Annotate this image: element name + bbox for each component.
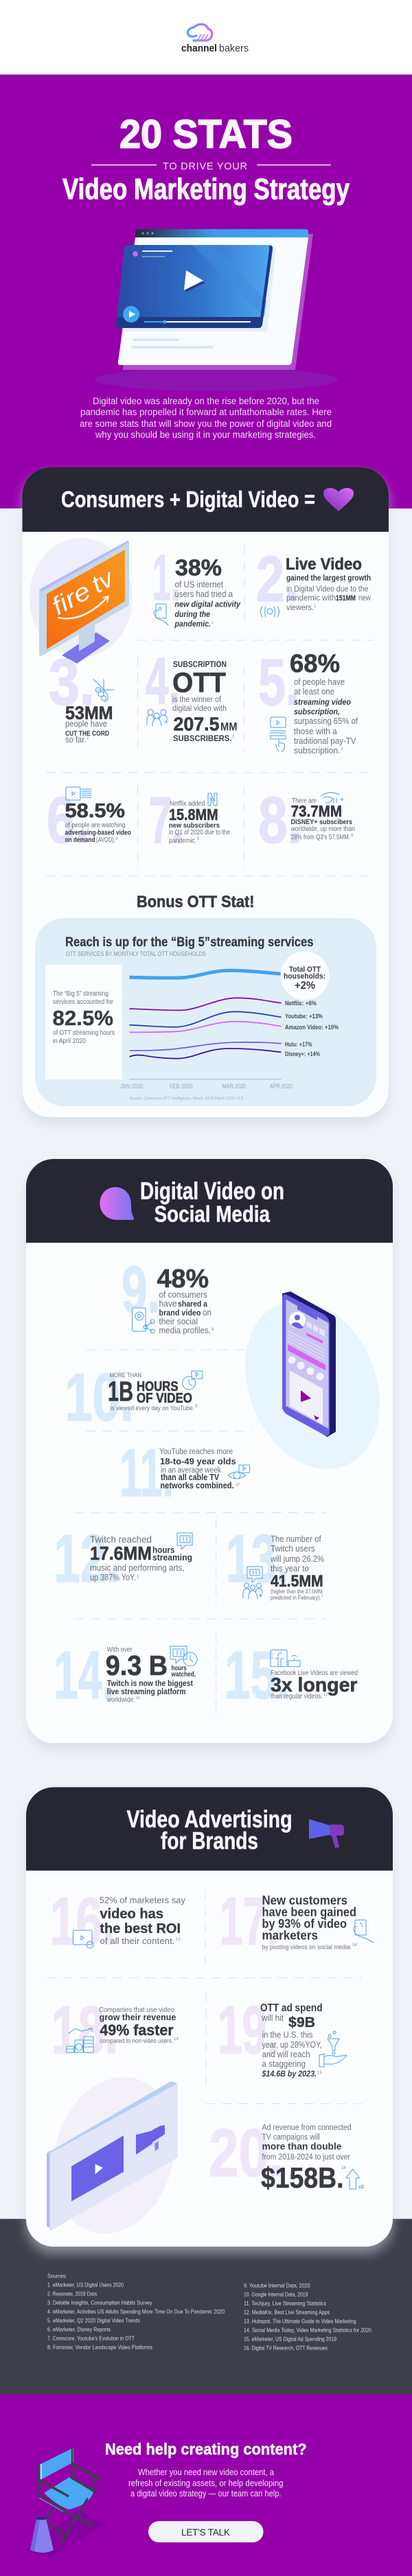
heading: digital video on social media [140,1178,284,1227]
stat 1 [152,541,241,629]
stat 3: 2 [87,736,89,740]
stat 1: new digital activity [174,600,241,609]
heading: digital video on social media: Social Media [154,1202,271,1227]
stat 19: a staggering [262,2059,306,2069]
stat 12: Twitch reached [90,1534,152,1545]
sources: right column: 10. Google Internal Data, 2019 [244,2291,308,2298]
chart labels: Hulu: +17% [285,1041,312,1049]
stat 4: 4. [146,644,180,718]
stat 12: hours [152,1545,174,1555]
stat 2: 1 [314,605,317,609]
stat 6: 6. [47,784,89,857]
stat 6: 4 [115,837,118,841]
intro paragraph [80,396,332,440]
stat 20: more than double [262,2141,342,2152]
stat 3: CUT THE CORD [65,729,109,738]
stat 16: of all their content. [100,1936,174,1946]
illustration: fire tv monitor: fire [47,576,95,620]
logo: channel bakers [181,24,249,54]
stat 2 [256,543,371,617]
stat 1: during the [174,609,210,619]
logo: channel bakers: bakers [219,43,249,54]
stat 19: in the U.S. this [262,2030,312,2039]
stat 17: 17. [220,1884,279,1959]
line chart: APR-2020 [270,1083,293,1090]
line chart: JAN-2020 [120,1083,143,1090]
stat 7: 15.8MM [169,806,218,823]
stat 12: music and performing arts, [90,1563,185,1573]
callout: total ott households: households: [284,972,325,981]
stat 13: 41.5MM [271,1572,323,1591]
stat 12: up 387% YoY. [90,1573,136,1582]
dividers [74,1350,325,1718]
stat 17 [220,1884,374,1959]
stat 9: shared a [178,1299,207,1309]
stat 5: 68% [290,649,340,678]
panel: video advertising for brands [26,1787,393,2253]
title [62,113,350,206]
sources: left column: 4. eMarketer, Activities US Adults Spending More Time On Due To Pandemic 2020 [47,2308,225,2315]
stat 6: (AVOD). [96,836,115,844]
stat 19: 19. [218,1992,279,2068]
stat 2: Live Video [286,555,362,574]
stat 6: 58.5% [65,800,125,822]
stat 12: streaming [152,1552,192,1562]
stat 7: new subscribers [169,821,220,830]
stat 9 [122,1253,214,1335]
stat 15: 15. [225,1637,289,1713]
sources: right column: 14. Social Media Today, Video Marketing Statistics for 2020 [244,2327,371,2334]
call to action text [128,2467,283,2498]
call to action text: Whether you need new video content, a [138,2467,275,2477]
stat 17: marketers [262,1929,318,1943]
stat 14: 9.3 B [106,1650,168,1681]
stat 9: media profiles. [159,1326,211,1335]
callout: 82.5% [45,965,122,1079]
stat 20: x2 [358,2185,364,2190]
stat 20: 20. [209,2115,284,2190]
stat 20: TV campaigns will [262,2133,320,2142]
stat 3: people have [65,719,107,729]
stat 15: than regular videos. [271,1693,323,1700]
stat 10: MORE THAN [110,1372,141,1379]
panel: reach chart [35,918,376,1106]
stat 19: OTT ad spend [260,2002,323,2014]
button: let's talk: LET'S TALK [181,2527,230,2538]
stat 4: SUBSCRIBERS. [173,735,232,743]
stat 14: watched, [171,1671,196,1678]
stat 18: 14 [174,2037,179,2041]
stat 4: is the winner of [172,696,222,704]
chart heading: OTT SERVICES BY MONTHLY TOTAL OTT HOUSEHOLDS [66,950,206,958]
stat 1: users had tried a [174,589,233,599]
stat 12 [54,1521,192,1596]
stat 5: subscription. [294,746,341,756]
stat 4: OTT [172,667,226,699]
stat 7: Netflix added [170,799,205,808]
stat 9: brand video [159,1308,201,1318]
stat 1: of US internet [174,580,223,589]
stat 17: by 93% of video [262,1917,347,1931]
heading: video advertising for brands: Video Advertising [126,1806,293,1833]
title: 20 STATS [119,113,293,156]
stat 10: 9 [195,1405,198,1409]
heading: bonus ott stat: Bonus OTT Stat! [137,893,254,911]
chart heading: Reach is up for the “Big 5”streaming services [65,935,313,950]
stat 8: 6 [351,834,354,838]
stat 16: video has [100,1906,163,1921]
stat 20: Ad revenue from connected [262,2124,352,2132]
sources: left column: 8. Forrester, Vendor Landscape Video Platforms [47,2344,152,2351]
stat 11 [119,1435,250,1510]
stat 3: 53MM [65,703,113,723]
line chart: Source: Comscore OTT Intelligence, March 2019-March 2020, U.S. [130,1097,244,1101]
stat 9: their social [159,1317,198,1326]
stat 17: have been gained [262,1906,356,1919]
stat 9: 8 [211,1328,214,1332]
callout: 82.5%: 82.5% [52,1006,113,1030]
dividers [46,546,374,876]
stat 5: at least one [294,687,334,696]
stat 8: 73.7MM [291,802,342,820]
stat 13: Twitch users [271,1543,315,1554]
stat 5: traditional pay-TV [294,736,356,746]
stat 16: the best ROI [100,1921,181,1936]
stat 11: in an average week [161,1466,221,1475]
chart labels: Youtube: +13% [285,1013,323,1020]
stat 12: 12. [54,1521,119,1596]
panel: consumers + digital video [22,467,389,1124]
illustration: ad billboard [35,2063,193,2248]
sources: right column: 15. eMarketer, US Digital Ad Spending 2019 [244,2336,336,2343]
stat 2: new [358,594,371,602]
stat 14: worldwide. [106,1696,135,1704]
icon: heart [323,488,354,511]
stat 13: 13. [226,1521,289,1596]
title: Video Marketing Strategy [62,173,350,206]
stat 14: 14. [54,1637,114,1713]
stat 5: those with a [294,727,337,736]
heading: digital video on social media: Digital Video on [140,1178,284,1205]
callout: total ott households: +2% [295,980,315,992]
sources: right column: 16. Digital TV Research, OTT Revenues [244,2345,328,2352]
stat 14: hours [172,1665,187,1672]
stat 4: 207.5 [173,714,220,734]
illustration: fire tv monitor [30,538,133,664]
stat 20: $158B. [261,2162,343,2194]
stat 11: networks combined. [160,1481,234,1490]
stat 2: 2. [256,543,299,615]
stat 4: MM [220,721,238,733]
stat 5: of people have [294,677,345,687]
stat 2: pandemic with [286,594,336,602]
stat 7: 7. [149,784,183,857]
stat 10: OF VIDEO [137,1391,192,1406]
stat 3: so far. [65,735,87,745]
heading: video advertising for brands: for Brands [161,1828,258,1855]
stat 9: have [159,1299,177,1309]
stat 9: 9. [122,1253,160,1326]
stat 11: than all cable TV [161,1473,220,1482]
title: TO DRIVE YOUR [163,161,247,172]
call to action text: refresh of existing assets, or help developing [128,2478,283,2488]
stat 19 [218,1992,347,2079]
stat 6: of people are watching [65,821,126,829]
stat 20 [209,2115,364,2194]
stat 19: will hit [261,2013,284,2023]
stat 11: 18-to-49 year olds [160,1456,236,1466]
stat 19: and will reach [262,2050,310,2059]
chart labels [285,1000,339,1058]
stat 1: 1. [152,541,180,613]
illustration: fire tv monitor: tv [87,563,119,598]
call to action heading: Need help creating content? [105,2440,307,2458]
sources: left column: 5. eMarketer, Q2 2020 Digital Video Trends [47,2317,140,2324]
sources: right column: 9. Youtube Internal Data, 2020 [244,2282,310,2289]
sources: right column: 12. MediaKix, Best Live Streaming Apps [244,2309,330,2316]
callout: total ott households [280,951,330,1000]
stat 10: 1B [108,1376,133,1407]
intro paragraph: why you should be using it in your marketing strategies. [95,430,316,440]
stat 5: surpassing 65% of [294,716,358,726]
stat 12: 1 [137,1575,139,1579]
stat 12: 17.6MM [90,1543,152,1564]
sources: left column: 3. Deloitte Insights, Consumption Habits Survey [47,2299,152,2306]
stat 19: 15 [317,2071,322,2075]
stat 16: 13 [176,1938,181,1942]
stat 19: $9B [288,2015,315,2030]
stat 3 [49,646,114,745]
stat 7 [149,784,230,857]
sources: left column: 2. Resonate, 2019 Data [47,2291,97,2297]
stat 6: advertising-based video [65,829,131,837]
stat 2: gained the largest growth [286,574,371,583]
stat 19: year, up 28%YOY, [262,2040,322,2050]
sources: right column [244,2282,371,2352]
stat 18: 49% faster [100,2022,174,2039]
stat 13: 1 [321,1594,323,1598]
stat 10: is viewed every day on YouTube. [111,1405,194,1412]
illustration: director's chair and megaphone [25,2447,106,2557]
logo: channel bakers: channel [181,43,217,54]
stat 4: SUBSCRIPTION [173,661,227,669]
sources: left column: 6. eMarketer, Disney Reports [47,2326,111,2333]
sources: right column: 11. Techjury, Live Streaming Statistics [244,2300,326,2307]
stat 10: HOURS [137,1379,179,1394]
stat 19: $14.6B by 2023. [262,2069,317,2079]
stat 16: 52% of marketers say [100,1895,185,1905]
stat 14: Twitch is now the biggest [107,1680,193,1688]
stat 1: 1 [211,621,214,625]
stat 13: The number of [271,1534,321,1544]
sources: left column: 1. eMarketer, US Digital Users 2020 [47,2282,124,2288]
stat 15: Facebook Live Videos are viewed [271,1670,358,1677]
stat 9: of consumers [159,1290,207,1300]
stat 14: With over [107,1646,133,1654]
hero illustration: video player window [95,229,338,391]
chart heading: 7 [314,939,317,944]
stat 7: in Q1 of 2020 due to the [169,828,230,836]
stat 2: 151MM [336,594,356,602]
stat 5: subscription, [294,707,340,716]
stat 8: worldwide, up more than [290,825,355,833]
stat 1: pandemic. [174,619,211,629]
intro paragraph: pandemic has propelled it forward at unfathomable rates. Here [80,407,332,417]
callout: 82.5%: The “Big 5” streaming [53,990,108,998]
stat 13: predicted in February). [271,1594,321,1601]
callout: 82.5%: of OTT streaming hours [53,1029,115,1037]
stat 15: 12 [323,1693,328,1697]
stat 6 [47,784,131,857]
call to action text: a digital video strategy — our team can help. [130,2488,282,2498]
stat 14: 11 [136,1696,141,1700]
panel: digital video on social media [26,1159,404,1750]
sources: left column [47,2273,225,2351]
stat 10: 10. [65,1359,134,1435]
chart labels: Amazon Video: +10% [285,1024,339,1031]
stat 9: 48% [157,1265,209,1293]
stat 20: 16 [341,2166,346,2170]
line chart [120,970,293,1101]
stat 11: 11. [119,1435,174,1510]
line chart: FEB-2020 [170,1083,192,1090]
sources: left column: Sources: [47,2273,67,2280]
chart heading [65,935,317,958]
stat 13: this year to [271,1563,309,1573]
stat 18: compared to non-video users. [100,2037,173,2044]
stat 17: 14 [352,1943,357,1947]
line chart: MAR-2020 [222,1083,246,1090]
heading: consumers + digital video: Consumers + Digital Video = [61,487,315,512]
stat 3: 3. [49,646,95,719]
stat 2: viewers. [286,604,314,612]
stat 17: by posting videos on social media. [262,1943,352,1952]
dividers [47,1889,362,2104]
stat 16 [50,1884,185,1959]
callout: total ott households: Total OTT [289,965,321,974]
stat 2: in Digital Video due to the [286,585,368,594]
stat 18: Companies that use video [99,2006,174,2014]
stat 5: streaming video [294,697,351,707]
intro paragraph: Digital video was already on the rise before 2020, but the [93,396,319,406]
illustration: phone [221,1280,404,1489]
stat 7: pandemic. [169,836,196,845]
stat 11: YouTube reaches more [159,1448,233,1456]
callout: 82.5%: in April 2020 [53,1037,86,1045]
stat 9: on [203,1308,211,1318]
stat 13: (higher than the 37.5MM [271,1588,323,1595]
stat 5: 5. [258,646,299,719]
stat 18: 18. [52,1992,118,2068]
stat 15: 3x longer [271,1674,357,1696]
stat 8: 8. [258,784,302,857]
button: let's talk [148,2521,264,2542]
stat 17: New customers [262,1894,347,1908]
stat 8 [258,784,355,857]
stat 18: grow their revenue [100,2012,176,2022]
sources: right column: 13. Hubspot, The Ultimate Guide to Video Marketing [244,2318,356,2325]
stat 1: 38% [175,555,222,581]
heading: video advertising for brands [126,1806,293,1855]
stat 5: 3 [341,747,343,751]
intro paragraph: are some stats that will show you the power of digital video and [80,419,332,429]
stat 5 [258,646,358,756]
stat 20: from 2018-2024 to just over [262,2153,350,2162]
chart labels: Netflix: +6% [285,1000,317,1007]
stat 4: digital video with [172,705,227,713]
stat 13: will jump 26.2% [270,1554,324,1564]
stat 14 [54,1637,197,1713]
stat 4 [146,644,238,743]
stat 8: 28% from Q3's 57.5MM. [291,833,350,841]
stat 8: There are [292,797,317,805]
icon: megaphone [309,1819,344,1848]
stat 14: live streaming platform [107,1688,185,1696]
chart labels: Disney+: +14% [285,1051,320,1058]
stat 4: 1 [232,735,235,739]
stat 11: 10 [236,1483,240,1487]
sources: left column: 7. Comscore, Youtube's Evolution in OTT [47,2335,135,2342]
icon: speech bubble [100,1187,134,1220]
stat 6: on demand [65,836,95,844]
callout: 82.5%: services accounted for [53,998,113,1006]
stat 8: DISNEY+ subscibers [291,818,352,826]
stat 7: 5 [197,837,200,841]
stat 16: 16. [50,1884,115,1959]
stat 10 [65,1359,203,1435]
